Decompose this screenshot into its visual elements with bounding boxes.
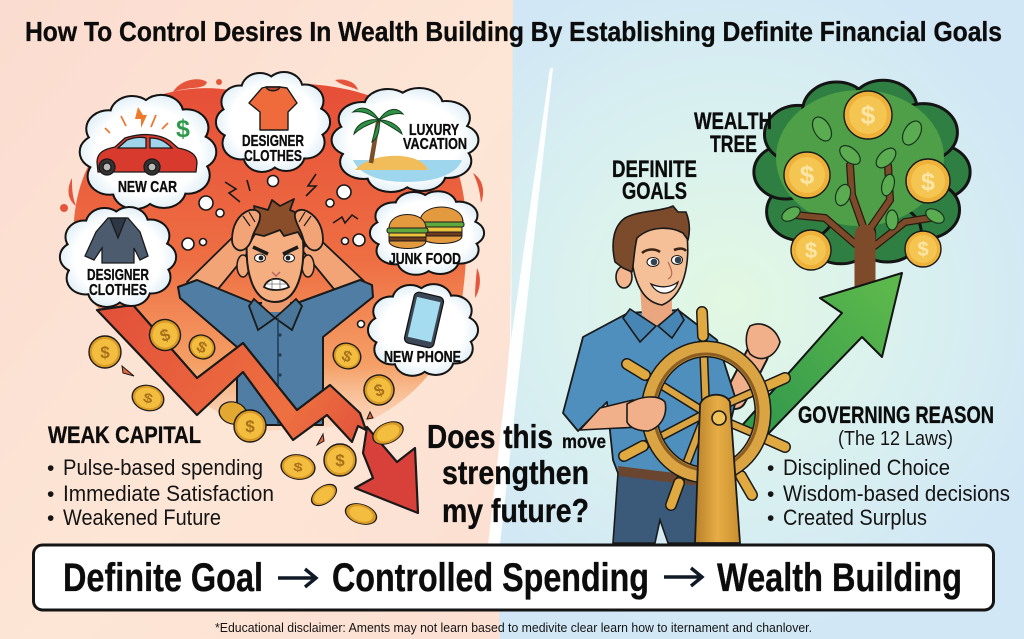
handles: [624, 312, 785, 505]
coin: $: [292, 461, 304, 475]
text block: weak capital: Weakened Future: [63, 505, 221, 530]
coin: [329, 339, 365, 373]
callout: central question: move: [562, 432, 606, 453]
pedestal: [695, 395, 740, 543]
label: DESIGNER: [242, 133, 304, 150]
brows and eyes: [642, 249, 686, 293]
coin: [324, 444, 356, 476]
icon: stress marks: [225, 174, 358, 223]
ship wheel: [624, 312, 785, 505]
divider: white slash: [488, 68, 553, 545]
label: definite goals: GOALS: [622, 178, 687, 205]
left forearm: [580, 400, 640, 430]
coin: $: [861, 100, 876, 130]
icon: phone: [404, 291, 444, 349]
text block: weak capital: Pulse-based spending: [63, 455, 263, 480]
coin: $: [917, 239, 929, 261]
coin: [906, 159, 950, 203]
label: wealth tree: [694, 108, 772, 158]
coin: [784, 152, 830, 198]
head: [613, 206, 689, 305]
callout: central question: Does this: [427, 418, 553, 455]
hub: [712, 411, 726, 425]
green rising arrow: [738, 273, 902, 434]
text block: governing reason: Disciplined Choice: [783, 455, 950, 480]
coin: $: [335, 451, 345, 470]
text block: governing reason: •: [767, 507, 774, 530]
head: [237, 226, 314, 312]
crown: [754, 80, 970, 264]
text block: governing reason: [767, 402, 1010, 530]
disclaimer: *Educational disclaimer: Aments may not learn based to medivite clear learn how to iternament and chanlover.: [215, 620, 812, 635]
red falling arrow: [97, 305, 418, 513]
label: CLOTHES: [89, 282, 147, 299]
text block: weak capital: •: [47, 483, 54, 506]
hands: [232, 210, 323, 250]
icon: palm leaves: [353, 108, 403, 142]
icon: bolt: [135, 107, 147, 128]
label: NEW CAR: [118, 179, 177, 196]
forearms: [187, 233, 365, 294]
text block: governing reason: (The 12 Laws): [838, 428, 953, 450]
tree coins: [784, 91, 950, 270]
jeans: [613, 473, 712, 543]
panel: left peach background: [0, 0, 514, 639]
icon: arrow shards: [122, 366, 373, 445]
text block: weak capital: WEAK CAPITAL: [48, 422, 201, 449]
text block: weak capital: •: [47, 457, 54, 480]
hair: [613, 206, 689, 272]
icon: thought bubbles: [182, 176, 365, 328]
coin: [217, 399, 249, 427]
coin: [234, 410, 266, 442]
spokes: [643, 336, 767, 483]
hand on wheel: [627, 397, 666, 431]
coin: $: [805, 238, 817, 263]
shirt with sleeves: [178, 280, 373, 425]
label: wealth tree: WEALTH: [694, 108, 772, 135]
coin: [360, 371, 398, 409]
icon: sparks: [105, 115, 168, 133]
collar: [623, 309, 684, 342]
coin: [791, 230, 831, 270]
leaves: [779, 114, 947, 230]
coin: [129, 382, 167, 414]
belt: [618, 466, 700, 486]
text block: governing reason: •: [767, 457, 774, 480]
label: CLOTHES: [244, 148, 302, 165]
coin: $: [921, 168, 935, 196]
cloud: new car: [81, 96, 215, 208]
raised right arm: [735, 324, 780, 398]
icon: red car: [97, 135, 197, 175]
callout: central question: [427, 418, 606, 529]
shirt with sleeve: [563, 310, 736, 480]
label: definite goals: [612, 156, 697, 205]
coin: [905, 231, 941, 267]
coin: $: [339, 347, 355, 366]
label: VACATION: [403, 136, 467, 153]
trunk and branches: [795, 165, 930, 292]
text block: governing reason: •: [767, 483, 774, 506]
text block: weak capital: •: [47, 507, 54, 530]
coin: $: [141, 390, 155, 407]
icon: jacket: [85, 218, 148, 263]
coin: [844, 91, 892, 139]
callout: central question: my future?: [442, 492, 589, 529]
illustration: confident man at wheel: [563, 206, 785, 543]
banner: goal to wealth flow: Wealth Building: [717, 556, 962, 600]
rim: [649, 349, 763, 475]
coin: $: [194, 338, 210, 357]
cloud: designer clothes left: [61, 208, 175, 306]
coin: $: [371, 380, 387, 401]
coin: [369, 417, 407, 449]
coin: $: [157, 325, 173, 346]
icon: sea and island: [353, 118, 462, 182]
coin: $: [100, 343, 110, 362]
cloud: new phone: [369, 285, 477, 375]
arrow: [278, 569, 316, 587]
panel: stress burst background: [60, 79, 483, 432]
banner: goal to wealth flow: Controlled Spending: [332, 556, 649, 600]
text block: weak capital: [47, 422, 274, 530]
label: LUXURY: [409, 122, 459, 139]
text block: governing reason: Created Surplus: [783, 505, 927, 530]
label: DESIGNER: [87, 267, 149, 284]
coin: [343, 500, 379, 528]
panel: right blue background: [498, 0, 1024, 639]
cloud: junk food: [371, 192, 483, 274]
coin: [145, 315, 185, 355]
coin: $: [245, 417, 255, 436]
cloud: luxury vacation: [333, 89, 477, 191]
coin: [185, 331, 219, 363]
cloud: designer clothes top: [217, 73, 329, 171]
arrow: [664, 568, 702, 586]
banner: goal to wealth flow: Definite Goal: [63, 556, 263, 600]
collar and buttons: [249, 299, 302, 425]
coin: [308, 480, 340, 510]
text block: weak capital: Immediate Satisfaction: [63, 481, 274, 506]
coin: $: [800, 160, 815, 190]
banner: goal to wealth flow: [34, 545, 994, 610]
coin: [279, 453, 317, 481]
label: definite goals: DEFINITE: [612, 156, 697, 183]
label: NEW PHONE: [384, 349, 461, 366]
icon: burger front: [387, 214, 428, 248]
icon: burger back: [419, 207, 464, 244]
icon: green dollar: $: [176, 115, 190, 143]
label: JUNK FOOD: [389, 251, 461, 268]
illustration: money tree: [754, 80, 970, 292]
label: wealth tree: TREE: [710, 131, 757, 158]
hair: [247, 199, 306, 246]
coin: [89, 336, 121, 368]
icon: t-shirt: [249, 87, 297, 130]
callout: central question: strengthen: [442, 454, 589, 491]
text block: governing reason: Wisdom-based decisions: [783, 481, 1010, 506]
neck: [640, 288, 672, 326]
falling coins: [89, 315, 407, 528]
illustration: stressed man: [178, 199, 373, 425]
